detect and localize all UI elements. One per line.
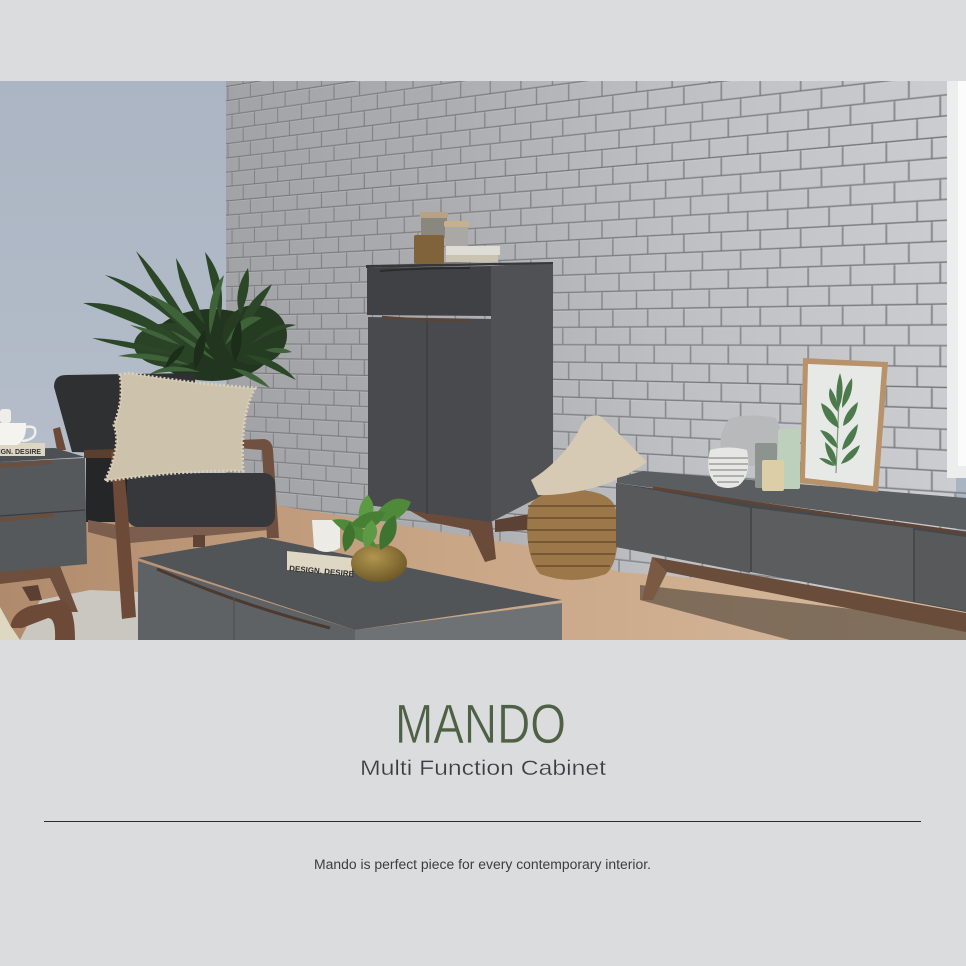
console top xyxy=(617,471,966,530)
left side cabinet xyxy=(0,409,87,612)
book on table: DESIGN. DESIRE xyxy=(289,564,355,579)
console wood base xyxy=(652,557,966,632)
title: MANDO xyxy=(395,692,566,755)
small chair arm bottom left xyxy=(0,600,75,640)
rear left post xyxy=(53,427,66,450)
left painted wall xyxy=(0,81,240,561)
console wood edge xyxy=(653,488,966,533)
book on table xyxy=(287,551,355,579)
side cabinet legs xyxy=(0,566,78,612)
left arm xyxy=(84,449,118,458)
chair back xyxy=(54,373,195,455)
cabinet side xyxy=(491,262,553,522)
room scene furniture xyxy=(0,81,966,640)
window frame xyxy=(947,81,966,478)
floor xyxy=(0,497,966,640)
green candle xyxy=(778,429,800,489)
table left face xyxy=(138,561,355,640)
tall grey cabinet xyxy=(366,262,553,562)
tv console xyxy=(616,471,966,632)
seat rail xyxy=(88,516,268,543)
cushion on basket xyxy=(531,415,647,495)
divider xyxy=(44,821,921,822)
subtitle: Multi Function Cabinet xyxy=(360,757,606,780)
cabinet drawer xyxy=(367,266,491,316)
book on side cabinet xyxy=(0,443,45,456)
cabinet top xyxy=(366,262,553,268)
side cabinet handles xyxy=(0,462,54,520)
woven pillow xyxy=(105,373,255,481)
rug xyxy=(20,590,140,640)
coffee table xyxy=(138,537,562,640)
framed leaf print xyxy=(800,358,888,492)
small green plant xyxy=(332,495,411,552)
seat cushion xyxy=(127,473,275,527)
cream candle xyxy=(762,460,784,491)
decorative vase xyxy=(720,416,781,466)
description: Mando is perfect piece for every contemporary interior. xyxy=(314,857,651,872)
table handle xyxy=(157,569,330,628)
door handle xyxy=(382,317,470,320)
cabinet legs xyxy=(405,508,496,562)
console body underlay xyxy=(616,483,966,612)
armchair xyxy=(53,373,279,619)
brick wall pattern xyxy=(226,81,966,591)
potted plant xyxy=(83,251,296,388)
right post and arm xyxy=(238,439,279,538)
front post xyxy=(111,449,136,619)
striped cup on table xyxy=(312,520,340,552)
console drawers xyxy=(616,483,750,573)
seat inner xyxy=(86,458,131,522)
grey candle xyxy=(755,443,777,488)
wicker basket xyxy=(527,490,618,580)
table right face xyxy=(355,603,562,640)
jars and books on cabinet xyxy=(414,212,500,264)
brick wall base tone xyxy=(226,81,956,601)
side cabinet top xyxy=(0,448,85,462)
striped bowl xyxy=(708,448,748,488)
console shadow xyxy=(640,585,966,640)
drawer handle xyxy=(380,268,470,271)
white cups xyxy=(0,423,26,445)
cabinet doors xyxy=(368,317,491,522)
table top xyxy=(138,537,562,630)
rear leg xyxy=(193,535,205,547)
side cabinet front xyxy=(0,458,87,572)
photo: living room scene xyxy=(0,81,966,640)
gold vase xyxy=(351,544,407,582)
console leg xyxy=(642,557,668,600)
text panel xyxy=(44,692,921,872)
